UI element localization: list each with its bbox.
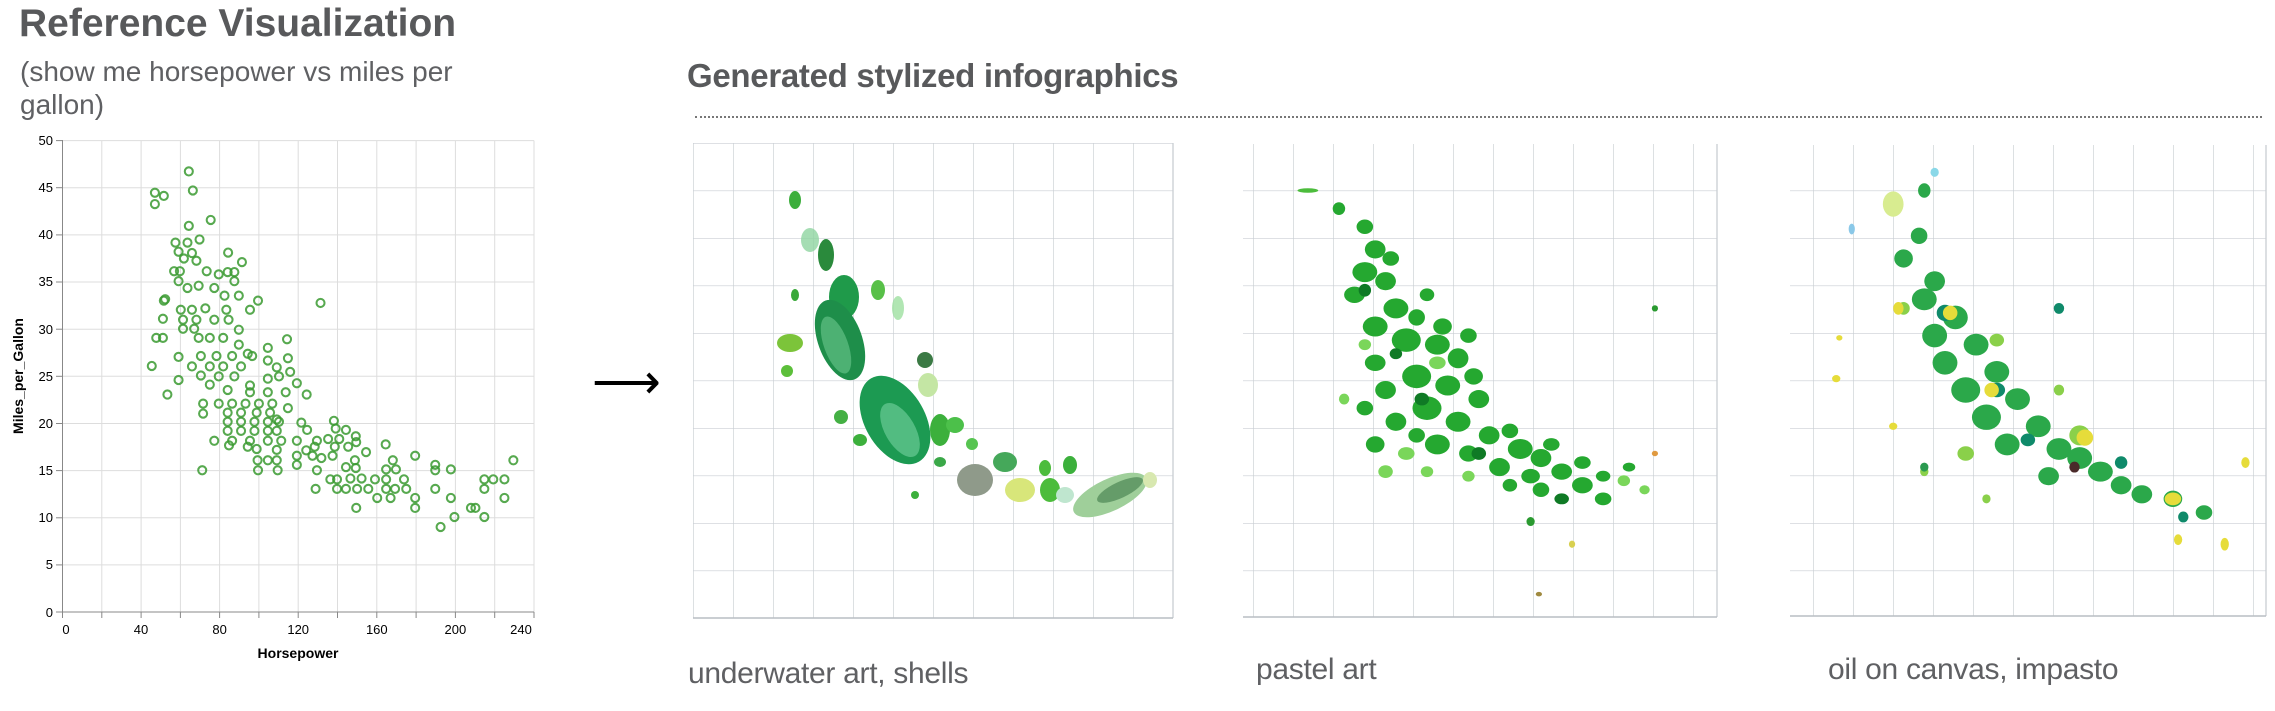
chart: reference scatter plot: 0 [62,622,70,637]
label: oil on canvas, impasto: oil on canvas, impasto [1828,653,2118,686]
arrow: ⟶ [592,356,661,409]
chart: reference scatter plot: 10 [39,510,53,525]
chart: reference scatter plot: 15 [39,463,53,478]
chart: reference scatter plot: 30 [39,322,53,337]
panel: underwater art, shells [693,143,1173,618]
chart: reference scatter plot: 240 [510,622,532,637]
chart: reference scatter plot: 40 [134,622,148,637]
divider dotted [695,116,2262,118]
chart: reference scatter plot: 160 [366,622,388,637]
chart: reference scatter plot: 200 [445,622,466,637]
panel: pastel art [1243,144,1717,617]
chart: reference scatter plot: 50 [39,133,53,148]
chart: reference scatter plot: 40 [39,227,53,242]
chart: reference scatter plot: 45 [39,180,53,195]
chart: reference scatter plot: 20 [39,416,53,431]
chart: reference scatter plot: 35 [39,274,53,289]
chart: reference scatter plot [10,133,534,661]
heading: generated stylized infographics: Generated stylized infographics [687,57,1178,94]
chart: reference scatter plot: 25 [39,369,53,384]
label: pastel art: pastel art [1256,653,1376,686]
chart: reference scatter plot: 0 [46,605,53,620]
chart: reference scatter plot: Horsepower [258,645,339,661]
chart: reference scatter plot: 120 [287,622,309,637]
chart: reference scatter plot: 5 [46,557,53,572]
label: underwater art, shells: underwater art, shells [688,657,968,690]
subtitle: prompt: (show me horsepower vs miles per gallon) [20,56,453,120]
title: reference visualization: Reference Visualization [19,2,456,45]
chart: reference scatter plot: Miles_per_Gallon [10,318,26,434]
panel: oil on canvas, impasto [1790,145,2266,616]
chart: reference scatter plot: 80 [212,622,227,637]
